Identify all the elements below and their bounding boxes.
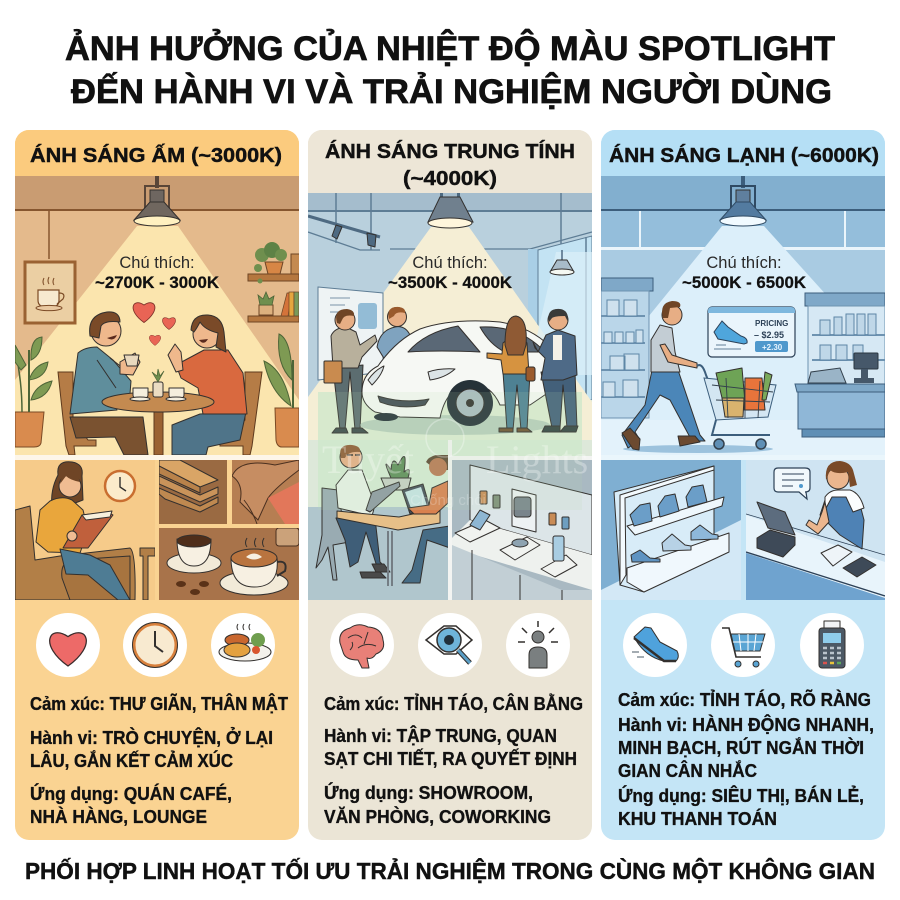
shelves with plant and books xyxy=(248,242,300,322)
footer tagline: PHỐI HỢP LINH HOẠT TỐI ƯU TRẢI NGHIỆM TRONG CÙNG MỘT KHÔNG GIAN xyxy=(25,856,875,884)
text: neutral light details: Ứng dụng: SHOWROOM, xyxy=(324,782,533,803)
text: cool light details: MINH BẠCH, RÚT NGẮN THỜI xyxy=(618,737,864,758)
coworking scene xyxy=(308,445,450,600)
icon: person with idea rays xyxy=(506,613,570,677)
text: cool light details: GIAN CÂN NHẮC xyxy=(618,760,757,781)
panel: neutral light xyxy=(308,130,592,840)
spotlight lamp xyxy=(428,193,473,228)
white electric car xyxy=(360,321,555,435)
text: warm light details: LÂU, GẮN KẾT CẢM XÚC xyxy=(30,750,233,771)
scene: cafe couple under warm spotlight xyxy=(15,176,300,455)
scene: supermarket shopper xyxy=(601,176,885,455)
text: neutral light details: Cảm xúc: TỈNH TÁO, CÂN BẰNG xyxy=(324,693,583,714)
person with folder xyxy=(324,309,377,433)
track lights xyxy=(308,216,380,247)
shopper with cart xyxy=(622,301,776,450)
icon: heart xyxy=(36,613,100,677)
man in teal sweater xyxy=(70,312,148,455)
vignette: cashier at register xyxy=(746,460,885,600)
icon: shopping cart xyxy=(711,613,775,677)
title xyxy=(65,29,835,111)
text: neutral light details: SẠT CHI TIẾT, RA QUYẾT ĐỊNH xyxy=(324,748,577,769)
text: cool light details: KHU THANH TOÁN xyxy=(618,808,777,829)
icon: clock xyxy=(123,613,187,677)
caption: cool: ~5000K - 6500K xyxy=(682,273,807,292)
caption: cool: Chú thích: xyxy=(706,254,782,272)
watermark: Lights xyxy=(486,437,588,482)
caption: neutral xyxy=(388,256,512,288)
person in blue shirt xyxy=(377,307,412,362)
product display scene xyxy=(452,460,592,600)
panel header: cool: ÁNH SÁNG LẠNH (~6000K) xyxy=(609,144,879,167)
scene: car showroom and coworking xyxy=(308,193,592,600)
text: cool light details xyxy=(618,689,874,829)
pricing card: PRICING xyxy=(755,319,788,328)
watermark: Tuyết xyxy=(322,437,414,482)
woman with bag xyxy=(487,316,535,432)
pricing card: +2.30 xyxy=(762,343,783,352)
panel header: warm xyxy=(15,130,299,176)
caption: warm xyxy=(96,256,220,288)
text: neutral light details: VĂN PHÒNG, COWORKING xyxy=(324,806,551,827)
text: warm light details: NHÀ HÀNG, LOUNGE xyxy=(30,806,207,827)
side pendant lamp xyxy=(537,250,592,375)
display board xyxy=(318,287,383,380)
spotlight lamp xyxy=(720,176,766,226)
left product shelf xyxy=(601,278,653,418)
caption: neutral: ~3500K - 4000K xyxy=(388,273,513,292)
text: warm light details: Hành vi: TRÒ CHUYỆN, Ở LẠI xyxy=(30,727,273,748)
woman in orange sweater xyxy=(168,315,247,455)
chat bubble xyxy=(774,468,810,499)
panel: cool light xyxy=(601,130,885,840)
text: warm light details xyxy=(30,693,288,827)
text: warm light details: Cảm xúc: THƯ GIÃN, THÂN MẬT xyxy=(30,693,288,714)
caption: cool xyxy=(682,254,807,292)
white gap xyxy=(15,455,299,460)
vignette: coffee cups xyxy=(159,528,299,600)
caption: neutral: Chú thích: xyxy=(412,254,488,272)
watermark xyxy=(318,392,588,510)
panel header: cool xyxy=(601,130,885,176)
picture frame: coffee cup xyxy=(25,211,75,323)
text: warm light details: Ứng dụng: QUÁN CAFÉ, xyxy=(30,783,232,804)
icon: payment terminal xyxy=(800,613,864,677)
title: ĐẾN HÀNH VI VÀ TRẢI NGHIỆM NGƯỜI DÙNG xyxy=(71,73,832,111)
icon: running shoe xyxy=(623,613,687,677)
text: cool light details: Ứng dụng: SIÊU THỊ, BÁN LẺ, xyxy=(618,785,864,806)
chairs xyxy=(58,372,262,455)
panel: warm light xyxy=(15,130,300,840)
watermark: Chống chói xyxy=(410,492,486,509)
pricing card xyxy=(708,307,795,357)
panel header: neutral: (~4000K) xyxy=(403,167,497,190)
icon: eye with magnifier xyxy=(418,613,482,677)
title: ẢNH HƯỞNG CỦA NHIỆT ĐỘ MÀU SPOTLIGHT xyxy=(65,29,835,68)
caption: warm: Chú thích: xyxy=(119,254,195,272)
hearts xyxy=(133,303,176,346)
white gap xyxy=(601,455,885,460)
text: neutral light details xyxy=(324,693,583,827)
panel header: neutral: ÁNH SÁNG TRUNG TÍNH xyxy=(325,140,575,163)
panel header: warm: ÁNH SÁNG ẤM (~3000K) xyxy=(30,144,282,167)
table with cups xyxy=(102,369,214,455)
panel header: neutral xyxy=(308,130,592,193)
caption: warm: ~2700K - 3000K xyxy=(95,273,220,292)
text: neutral light details: Hành vi: TẬP TRUNG, QUAN xyxy=(324,725,557,746)
icon: food plate xyxy=(211,613,275,677)
text: cool light details: Hành vi: HÀNH ĐỘNG NHANH, xyxy=(618,714,874,735)
spotlight lamp xyxy=(134,176,180,226)
wall clock xyxy=(105,471,135,501)
shadow under shopper xyxy=(623,445,773,453)
vignette: fabric xyxy=(232,460,299,524)
vignette: wood planks xyxy=(159,460,227,524)
vignette: shoe and bag display xyxy=(601,460,741,600)
icon: brain xyxy=(330,613,394,677)
man in navy suit xyxy=(533,309,578,432)
vignette: woman reading xyxy=(15,460,155,600)
potted plants xyxy=(15,334,299,447)
pricing card: – $2.95 xyxy=(754,330,784,340)
text: cool light details: Cảm xúc: TỈNH TÁO, RÕ RÀNG xyxy=(618,689,871,710)
checkout counter xyxy=(795,353,885,437)
right product shelf xyxy=(805,293,885,384)
